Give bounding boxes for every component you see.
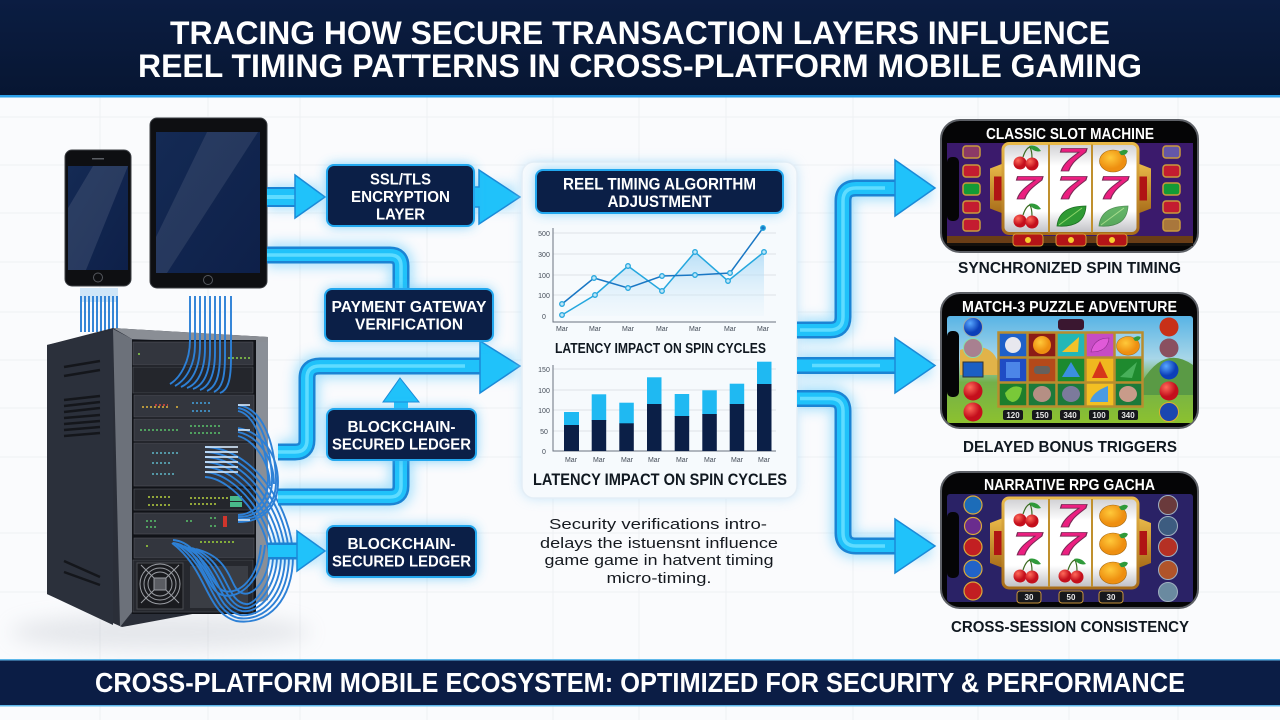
arrow: rack to second ledger bbox=[268, 531, 325, 571]
bar chart caption: LATENCY IMPACT ON SPIN CYCLES bbox=[533, 470, 787, 489]
panel heading: ADJUSTMENT bbox=[608, 193, 712, 211]
bar chart: Mar bbox=[676, 457, 689, 464]
arrow: panel to narrative RPG bbox=[797, 398, 935, 573]
label: SSL/TLS encryption layer: SSL/TLS bbox=[370, 172, 431, 188]
label: payment gateway verification: PAYMENT GATEWAY bbox=[332, 299, 487, 316]
screen heading: NARRATIVE RPG GACHA bbox=[984, 477, 1155, 494]
slot reels bbox=[990, 498, 1151, 588]
line chart: 0 bbox=[542, 314, 546, 321]
arrow: SSL to chart panel bbox=[474, 170, 520, 224]
score chips: 30 bbox=[1107, 593, 1116, 602]
line chart: Mar bbox=[589, 326, 602, 333]
arrow: tablet to SSL bbox=[267, 175, 325, 218]
reel symbols: 7 bbox=[1099, 170, 1130, 206]
arrow: ledger upward bbox=[383, 378, 419, 410]
bar chart: 100 bbox=[538, 408, 550, 415]
line chart: Mar bbox=[656, 326, 669, 333]
line chart: Mar bbox=[757, 326, 770, 333]
score chips: 340 bbox=[1121, 411, 1135, 420]
reel symbols bbox=[1013, 142, 1130, 228]
icon: tablet bbox=[150, 118, 267, 288]
label: SSL/TLS encryption layer bbox=[327, 165, 474, 226]
label: SSL/TLS encryption layer: ENCRYPTION bbox=[351, 189, 450, 206]
bar chart: Mar bbox=[648, 457, 661, 464]
panel: reel timing algorithm bbox=[522, 162, 797, 498]
panel heading: REEL TIMING ALGORITHM bbox=[563, 176, 756, 194]
score chips: 30 bbox=[1025, 593, 1034, 602]
line chart caption: LATENCY IMPACT ON SPIN CYCLES bbox=[555, 341, 766, 357]
side tokens left bbox=[963, 318, 983, 422]
character portraits bbox=[1158, 496, 1178, 602]
line chart: 500 bbox=[538, 231, 550, 238]
label: blockchain-secured ledger: BLOCKCHAIN- bbox=[348, 419, 456, 436]
text block: security note: Security verifications intro- bbox=[549, 516, 767, 533]
score chips bbox=[1003, 410, 1138, 420]
score chips: 340 bbox=[1063, 411, 1077, 420]
reel symbols: 7 bbox=[1013, 170, 1044, 206]
fibre connector highlights bbox=[205, 405, 250, 520]
score chips: 120 bbox=[1006, 411, 1020, 420]
caption: synchronized spin timing: SYNCHRONIZED SPIN TIMING bbox=[958, 260, 1181, 277]
text block: security note: game game in hatvent timing bbox=[544, 552, 774, 569]
phone: match-3 puzzle adventure bbox=[941, 293, 1198, 428]
icon: server rack bbox=[47, 328, 268, 627]
score chips: 150 bbox=[1035, 411, 1049, 420]
pipe: tablet to payment gateway bbox=[267, 255, 401, 290]
bar chart: Mar bbox=[731, 457, 744, 464]
icon: smartphone bbox=[65, 150, 131, 286]
phone: narrative RPG gacha bbox=[941, 472, 1198, 608]
label: payment gateway verification: VERIFICATION bbox=[355, 316, 463, 334]
arrow: panel to match-3 bbox=[797, 338, 935, 393]
title banner bbox=[0, 0, 1280, 98]
arrow: panel to classic slot bbox=[797, 160, 935, 330]
pipe arrow: rack to chart panel bbox=[278, 341, 520, 452]
score chips: 50 bbox=[1067, 593, 1076, 602]
caption: delayed bonus triggers: DELAYED BONUS TRIGGERS bbox=[963, 439, 1177, 456]
side icons left bbox=[964, 496, 982, 600]
reel symbols: 7 bbox=[1057, 498, 1088, 534]
line chart: Mar bbox=[724, 326, 737, 333]
side buttons left bbox=[963, 146, 980, 231]
label: payment gateway verification bbox=[325, 289, 493, 341]
label: SSL/TLS encryption layer: LAYER bbox=[376, 206, 425, 224]
panel heading bbox=[536, 170, 783, 213]
pipe: rack to blockchain ledger bbox=[278, 460, 401, 497]
gem grid bbox=[998, 332, 1143, 407]
label: blockchain-secured ledger 2: SECURED LEDGER bbox=[332, 554, 471, 570]
bar chart: 0 bbox=[542, 449, 546, 456]
bar chart: Mar bbox=[593, 457, 606, 464]
score chips bbox=[1017, 591, 1123, 603]
text block: security note bbox=[540, 516, 778, 587]
bar chart bbox=[538, 362, 776, 464]
footer banner bbox=[0, 659, 1280, 706]
soft rack shadow bbox=[10, 614, 310, 650]
reel symbols: 7 bbox=[1057, 142, 1088, 178]
side buttons right bbox=[1163, 146, 1180, 231]
phone: classic slot machine bbox=[941, 120, 1198, 252]
caption: cross-session consistency: CROSS-SESSION CONSISTENCY bbox=[951, 619, 1189, 636]
spin buttons bbox=[1013, 234, 1127, 246]
text block: security note: micro-timing. bbox=[606, 570, 712, 587]
line chart: 100 bbox=[538, 273, 550, 280]
reel symbols: 7 bbox=[1057, 170, 1088, 206]
line chart: Mar bbox=[622, 326, 635, 333]
bar chart: 50 bbox=[540, 429, 548, 436]
line chart bbox=[538, 226, 776, 333]
status LEDs bbox=[138, 354, 250, 546]
side tokens right bbox=[1160, 318, 1178, 422]
stop sign bbox=[1058, 319, 1084, 330]
score chips: 100 bbox=[1092, 411, 1106, 420]
label: blockchain-secured ledger bbox=[327, 409, 476, 460]
fibre bundle: phone to rack bbox=[80, 288, 118, 332]
rack units bbox=[133, 342, 254, 612]
cooling fan bbox=[137, 563, 183, 609]
line chart: Mar bbox=[689, 326, 702, 333]
title banner: TRACING HOW SECURE TRANSACTION LAYERS INFLUENCE bbox=[170, 15, 1110, 51]
bar chart: 150 bbox=[538, 367, 550, 374]
connector glow bbox=[267, 188, 930, 551]
footer banner: CROSS-PLATFORM MOBILE ECOSYSTEM: OPTIMIZED FOR SECURITY & PERFORMANCE bbox=[95, 667, 1185, 698]
slot reels bbox=[990, 144, 1151, 234]
label: blockchain-secured ledger 2: BLOCKCHAIN- bbox=[348, 536, 456, 553]
fibre bundle: cabling across rack bbox=[170, 296, 293, 622]
label: blockchain-secured ledger 2 bbox=[327, 526, 476, 577]
bar chart: Mar bbox=[565, 457, 578, 464]
screen heading: CLASSIC SLOT MACHINE bbox=[986, 126, 1154, 143]
reel symbols: 7 bbox=[1013, 526, 1044, 562]
title banner: REEL TIMING PATTERNS IN CROSS-PLATFORM MOBILE GAMING bbox=[138, 48, 1142, 84]
line chart: Mar bbox=[556, 326, 569, 333]
bar chart: Mar bbox=[621, 457, 634, 464]
line chart: 100 bbox=[538, 293, 550, 300]
bar chart: 100 bbox=[538, 388, 550, 395]
bar chart: Mar bbox=[758, 457, 771, 464]
screen heading: MATCH-3 PUZZLE ADVENTURE bbox=[962, 299, 1177, 316]
bar chart: Mar bbox=[704, 457, 717, 464]
gems bbox=[1005, 336, 1141, 402]
line chart: 300 bbox=[538, 252, 550, 259]
label: blockchain-secured ledger: SECURED LEDGER bbox=[332, 436, 471, 454]
text block: security note: delays the istuensnt influence bbox=[540, 535, 778, 552]
reel symbols bbox=[1013, 498, 1128, 584]
reel symbols: 7 bbox=[1057, 526, 1088, 562]
